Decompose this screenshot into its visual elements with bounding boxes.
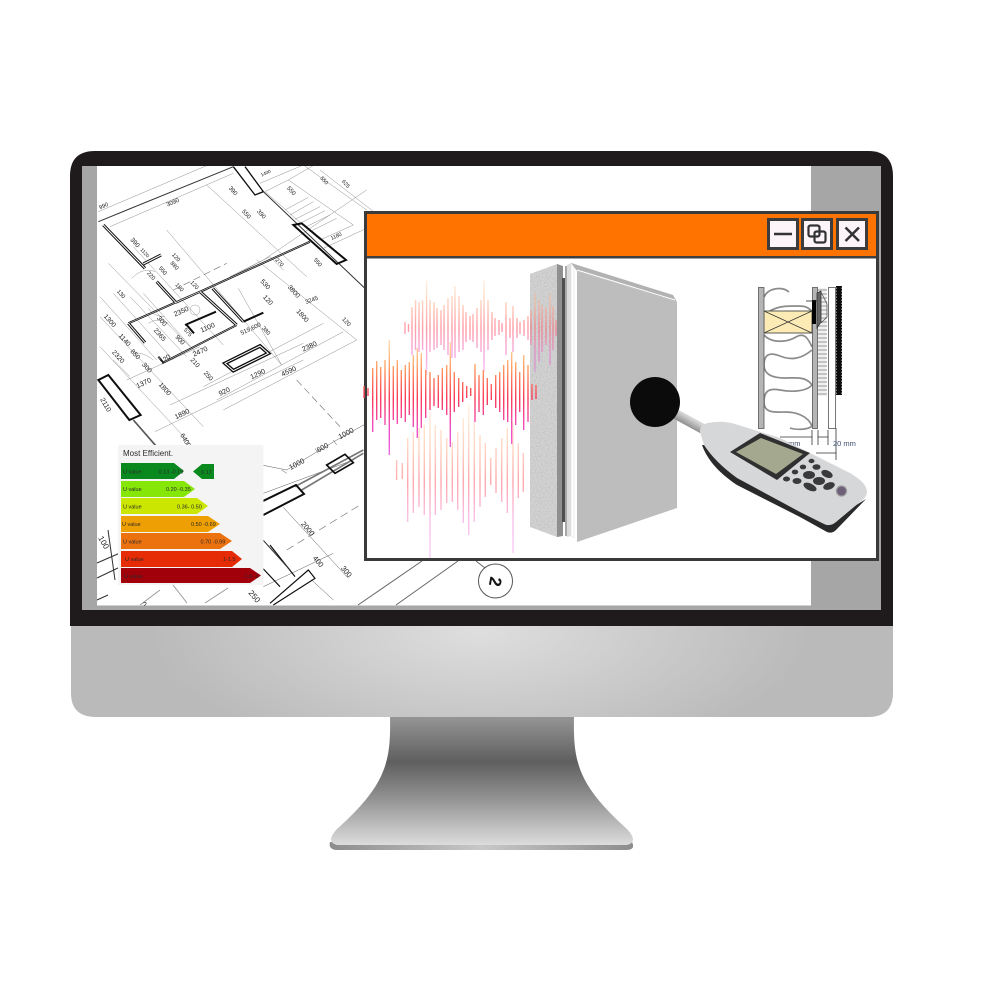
blueprint upper plan: 2320 [110,349,125,365]
blueprint lower plan: 300 [339,564,354,579]
blueprint upper plan: 1370 [136,377,153,390]
rating bar: 1.6-2: 1.6 -2 [244,574,259,580]
rating bar: 0.50-0.69: 0.50 -0.69 [191,522,216,528]
blueprint upper plan: 120 [261,294,274,307]
energy heading: Most Efficient. [123,449,173,458]
blueprint bottom lines [97,530,485,605]
blueprint upper plan: 2350 [173,306,190,318]
blueprint numbers lower left [96,534,262,609]
meter logo [836,486,846,496]
monitor stand [330,717,633,850]
blueprint upper plan: 3245 [305,295,320,306]
blueprint upper plan: 850 [129,348,141,361]
blueprint upper plan: 2110 [98,397,112,413]
blueprint upper plan: 3090 [166,198,181,209]
current rating pointer [193,464,214,479]
dimension labels: 20 mm [833,439,856,448]
blueprint upper plan: 390 [129,237,141,250]
blueprint upper plan [98,155,380,449]
blueprint lower plan: 400 [311,554,326,569]
rating bar: 1-1.5: 1-1.5 [223,557,236,563]
blueprint upper plan: 1180 [330,232,343,242]
blueprint upper plan: 4590 [281,366,298,378]
blueprint floor plan [96,155,811,609]
sound level meter [700,422,867,533]
blueprint upper plan: 130 [115,289,126,300]
rating bar: 0.70-0.99 [121,533,232,549]
energy rating panel [118,445,264,585]
monitor [70,151,893,850]
blueprint upper plan: 550 [240,209,252,221]
blueprint upper plan: 390 [227,186,238,198]
callout circle: section 2: 2 [485,575,505,588]
blueprint lower plan: 600 [315,441,330,454]
rating bar: 0.36-0.50 [121,498,208,514]
blueprint upper plan: 3800 [286,284,301,300]
blueprint upper plan: 575 [182,327,193,338]
blueprint upper plan: 550 [312,257,323,268]
button: minimise [768,220,798,248]
blueprint upper plan: 120 [189,280,199,291]
front gray panel [577,271,677,542]
meter keypad [783,459,836,493]
microphone rod [672,412,703,429]
blueprint upper plan: 900 [174,334,186,347]
blueprint numbers lower left: 100 [96,534,111,551]
blueprint upper plan: 250 [202,370,214,383]
rating bar: 0.13-0.19 [121,463,184,479]
blueprint upper plan: 120 [170,252,181,263]
rating bar: 0.70-0.99: 0.70 -0.99 [200,540,225,546]
blueprint upper plan: 210 [189,357,201,370]
meter display [730,433,810,480]
blueprint upper plan: 300 [140,362,153,375]
rating bar: 0.20-0.35: 0.20 -0.35 [166,487,191,493]
button: close [838,220,866,248]
rating bar: 1.6-2 [121,568,261,583]
blueprint upper plan: 380 [260,326,271,337]
rating bar: 0.50-0.69: U value [122,522,141,528]
blueprint upper plan: 1120 [139,247,150,259]
blueprint upper plan: 550 [319,176,329,186]
sound wave: top [405,280,556,375]
blueprint upper plan: 120 [159,353,172,366]
window frame [366,212,878,560]
monitor bezel [70,151,893,626]
rating bar: 0.13-0.19: 0.13 -0.19 [158,470,183,476]
window title bar [367,214,876,256]
rating bar: 0.36-0.50: 0.36- 0.50 [177,504,202,510]
sound wave: middle [364,340,536,455]
blueprint upper plan: 550 [157,266,168,277]
current rating pointer: 0.17 [201,470,212,476]
blueprint numbers lower left: 2 [143,602,147,609]
windscreen ball [630,377,680,427]
blueprint upper plan: 990 [98,202,109,211]
dimension labels: mm [788,439,800,448]
blueprint upper plan: 519,600 [240,322,263,337]
blueprint upper plan: 1100 [200,322,216,334]
blueprint upper plan: 1290 [250,368,267,381]
application window [366,212,878,560]
screen [82,166,881,610]
wall section diagram [758,286,856,460]
blueprint lower plan: 1000 [337,425,355,441]
wall panel [530,263,677,542]
blueprint upper plan: 220 [145,271,156,282]
black surface layer [836,286,842,395]
blueprint upper plan: 2380 [301,341,318,353]
rating bar: 0.50-0.69 [121,516,220,532]
blueprint upper plan: 550 [285,186,297,198]
coil layer [819,290,826,394]
blueprint numbers lower left: 250 [246,589,262,605]
blueprint upper plan: 880 [169,261,179,272]
rating bar: 0.20-0.35 [121,481,195,497]
rating bar: 0.13-0.19: U value [123,470,142,476]
blueprint upper plan: 2365 [152,327,167,343]
meter body [700,422,867,525]
blueprint upper plan: 1400 [260,169,272,178]
blueprint upper plan: 625 [340,179,351,190]
blueprint upper plan: 1140 [117,333,132,348]
blueprint upper plan: 1800 [157,382,172,398]
rating bar: 0.36-0.50: U value [123,504,142,510]
blueprint upper plan: 1800 [295,308,310,324]
rating bar: 0.20-0.35: U value [123,487,142,493]
concrete layer [530,264,557,537]
blueprint upper plan: 300 [155,315,168,328]
microphone [630,377,703,429]
blueprint upper plan: 390 [255,209,267,221]
blueprint upper plan: 180 [174,282,184,293]
timber stud [764,311,812,333]
blueprint upper plan: 530 [259,278,271,291]
sound wave: bottom [397,405,523,558]
insulation curve [764,289,812,429]
plates [758,288,764,428]
callout circle: section 2 [478,564,512,598]
blueprint upper plan: 920 [218,386,232,398]
blueprint upper plan: 1300 [102,313,117,329]
plasterboard layer [567,263,571,537]
blueprint lower plan [237,423,367,605]
blueprint upper plan: 1890 [174,408,191,421]
blueprint lower plan: 1000 [287,456,306,472]
sound waves [364,280,556,558]
rating bar: 1-1.5: U value [125,557,144,563]
blueprint lower plan: 2000 [299,519,317,538]
button: restore [802,220,832,248]
resilient clip [806,291,827,328]
rating bar: 1.6-2: U value [124,574,143,580]
rating bar: 1-1.5 [121,551,242,567]
dimension labels [788,439,856,448]
blueprint upper plan: 2470 [192,346,209,358]
rating bar: 0.70-0.99: U value [123,540,142,546]
meter dark underside [702,445,866,533]
blueprint upper plan: 6400 [178,432,192,449]
blueprint upper plan: 120 [340,317,352,329]
blueprint upper plan: 270 [274,257,284,268]
monitor chin [71,624,893,717]
dimension lines [780,428,836,460]
